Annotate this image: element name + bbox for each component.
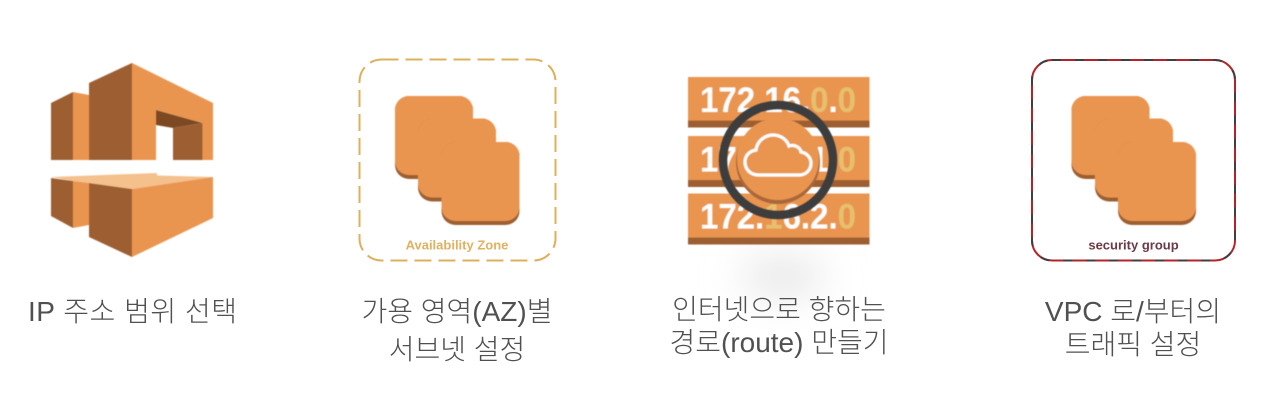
label: internet route [669,294,889,358]
label: VPC traffic: 트래픽 설정 [1065,329,1201,360]
label: IP range: IP 주소 범위 선택 [28,296,237,327]
label: subnets per AZ: 서브넷 설정 [389,334,525,365]
label: internet route: 인터넷으로 향하는 [672,294,886,325]
cloud badge [723,105,833,215]
icon: stacked instances [1072,96,1196,225]
label: subnets per AZ [361,296,553,365]
panel: availability zone [360,60,556,260]
label: subnets per AZ: 가용 영역(AZ)별 [361,296,553,327]
soft shadow under route icon [741,257,825,297]
icon: route table with cloud [688,77,870,244]
caption: security group: security group [1088,238,1179,252]
icon: stacked instances [395,96,520,225]
dashed border [1032,60,1235,260]
panel: security group [1032,60,1235,260]
label: VPC traffic: VPC 로/부터의 [1045,296,1221,327]
label: VPC traffic [1045,296,1221,360]
route bars: 172.16.0.0 [700,81,856,120]
label: internet route: 경로(route) 만들기 [669,327,889,358]
icon: VPC building [51,63,213,257]
dashed border [360,60,556,260]
caption: availability zone: Availability Zone [406,238,508,252]
route bars: 172.16.2.0 [700,198,856,236]
route bars: 172.16.1.0 [700,140,856,180]
route bars [688,77,870,244]
